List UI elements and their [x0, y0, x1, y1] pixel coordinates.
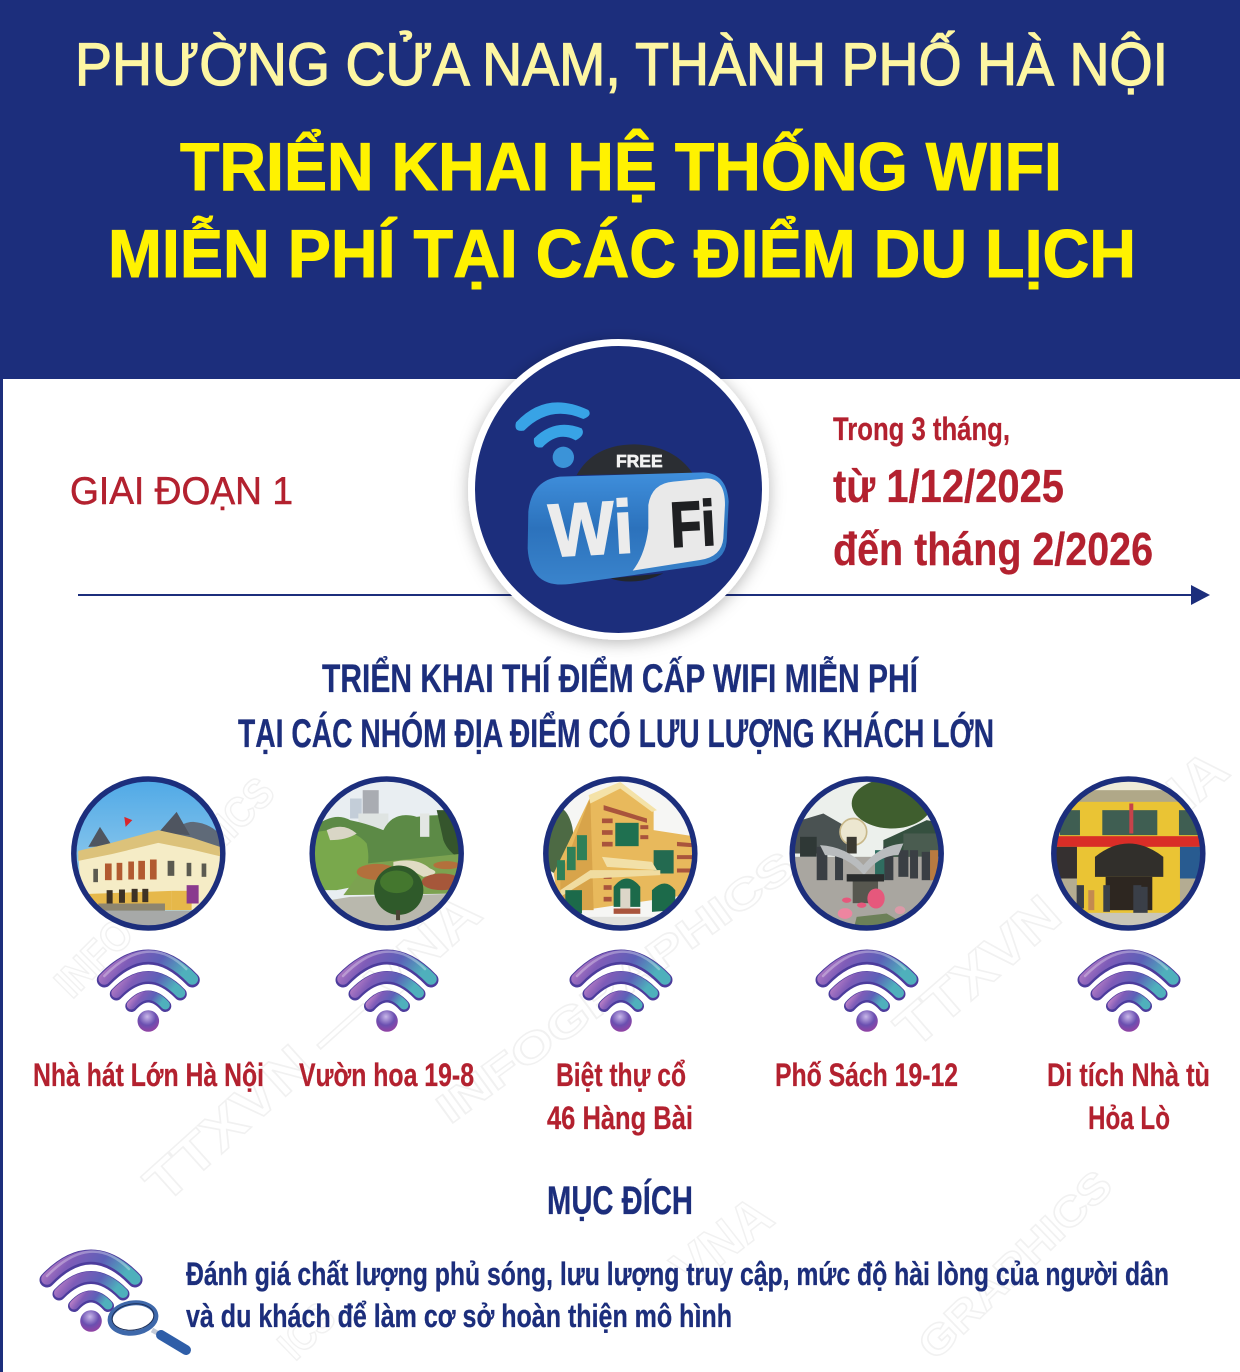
phase label: GIAI ĐOẠN 1 — [70, 470, 293, 513]
label: Biet thu co: 46 Hàng Bài — [547, 1100, 693, 1136]
purpose text — [186, 1256, 1169, 1334]
icon: wifi 2 — [343, 952, 431, 1032]
purpose text: và du khách để làm cơ sở hoàn thiện mô hình — [186, 1298, 732, 1334]
watermarks: ICS — [269, 1293, 344, 1368]
photo: Hoa Lo prison — [1052, 777, 1205, 933]
photo: 19-12 book street — [790, 777, 943, 930]
label: Nha hat Lon: Nhà hát Lớn Hà Nội — [33, 1057, 264, 1093]
icon: signal waves — [515, 402, 590, 468]
wifi pill — [528, 472, 729, 585]
watermarks: VNA — [660, 1184, 784, 1299]
timeline arrow — [78, 585, 1210, 605]
wifi pill: Fi — [669, 489, 717, 561]
photo: villa 46 Hang Bai — [540, 777, 697, 930]
title: main heading: MIỄN PHÍ TẠI CÁC ĐIỂM DU LỊCH — [108, 215, 1136, 292]
watermarks: TTXVN — VNA — [884, 738, 1240, 1059]
photo: 19-8 flower garden — [310, 777, 463, 930]
title: location line: PHƯỜNG CỬA NAM, THÀNH PHỐ HÀ NỘI — [75, 31, 1168, 98]
watermarks: TTXVN — VNA — [133, 882, 493, 1214]
label: Hoa Lo: Hỏa Lò — [1088, 1100, 1170, 1136]
label: Vuon hoa 19-8: Vườn hoa 19-8 — [299, 1057, 474, 1093]
photo: opera house — [72, 777, 225, 934]
watermarks: INFOGRAPHICS — [428, 842, 803, 1132]
icon: free wifi badge — [472, 342, 766, 636]
title: main heading — [108, 128, 1136, 292]
wifi pill: Wi — [547, 484, 635, 573]
purpose heading: MỤC ĐÍCH — [547, 1178, 693, 1223]
label: Biet thu co: Biệt thự cổ — [556, 1057, 686, 1093]
phase dates: đến tháng 2/2026 — [833, 523, 1153, 575]
phase dates: từ 1/12/2025 — [833, 460, 1064, 512]
icon: wifi with magnifier — [47, 1252, 186, 1350]
icon: wifi 3 — [577, 952, 665, 1032]
section heading: TRIỂN KHAI THÍ ĐIỂM CẤP WIFI MIỄN PHÍ — [322, 654, 919, 701]
icon: wifi 1 — [104, 952, 192, 1032]
label: Pho Sach: Phố Sách 19-12 — [775, 1057, 958, 1093]
free tab — [577, 444, 693, 582]
watermarks — [45, 738, 1240, 1368]
phase dates: Trong 3 tháng, — [833, 411, 1010, 447]
phase dates — [833, 411, 1153, 575]
label: Hoa Lo — [1047, 1057, 1210, 1136]
watermarks: GRAPHICS — [909, 1161, 1121, 1368]
title: main heading: TRIỂN KHAI HỆ THỐNG WIFI — [180, 128, 1062, 205]
section heading — [238, 654, 994, 756]
icon: wifi 4 — [823, 952, 911, 1032]
icon: wifi 5 — [1085, 952, 1173, 1032]
label: Biet thu co — [547, 1057, 693, 1136]
watermarks: INFOGRAPHICS — [45, 768, 283, 1006]
free tab: FREE — [616, 451, 663, 471]
